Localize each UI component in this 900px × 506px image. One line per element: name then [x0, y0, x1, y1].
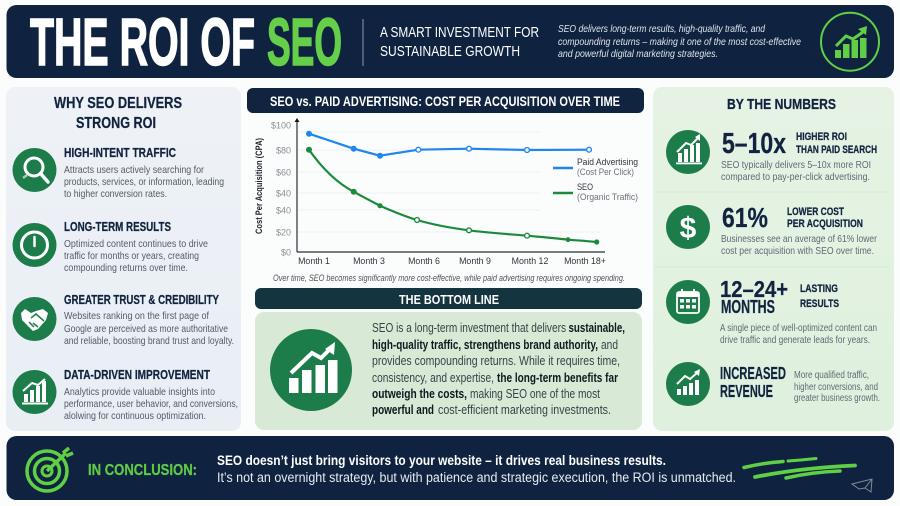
- bottom line text: the long-term benefits far: [497, 370, 618, 385]
- bottom line text: outweigh the costs,: [372, 386, 467, 401]
- item: greater trust and credibility: and reliable, boosting brand trust and loyalty.: [64, 335, 234, 347]
- bottom line text: and: [601, 337, 618, 352]
- stat: 61% lower cost: 61%: [722, 202, 768, 233]
- item: data-driven improvement: Analytics provide valuable insights into: [64, 386, 215, 398]
- stat: 61% lower cost: LOWER COST: [787, 206, 844, 218]
- icon: growth chart: [270, 329, 352, 411]
- legend: Paid Advertising: [577, 157, 638, 168]
- item: data-driven improvement: alolwing for continuous optimization.: [64, 410, 206, 422]
- stat: increased revenue: INCREASED: [720, 363, 786, 383]
- legend: (Organic Traffic): [577, 192, 638, 202]
- x axis labels: Month 12: [512, 256, 548, 266]
- y axis labels: $40: [276, 188, 291, 198]
- item: data-driven improvement: DATA-DRIVEN IMPROVEMENT: [64, 368, 210, 382]
- item: high-intent traffic: products, services, or information, leading: [64, 176, 224, 188]
- y axis labels: $40: [276, 206, 291, 216]
- icon: growth chart in circle: [821, 13, 879, 71]
- item: high-intent traffic: HIGH-INTENT TRAFFIC: [64, 146, 176, 160]
- header description: and powerful digital marketing strategies.: [558, 48, 718, 60]
- bottom line text: SEO is a long-term investment that delivers: [372, 320, 566, 335]
- title: SEO: [267, 5, 342, 80]
- item: high-intent traffic: Attracts users actively searching for: [64, 164, 204, 176]
- bottom line text: cost-efficient marketing investments.: [438, 402, 611, 417]
- stat: 12-24+ months: [666, 276, 877, 346]
- subtitle: A SMART INVESTMENT FOR: [380, 25, 539, 41]
- bottom line text: making SEO one of the most: [470, 386, 600, 401]
- header description: [558, 23, 801, 60]
- stat: increased revenue: More qualified traffic,: [794, 370, 869, 381]
- item: long-term results: [12, 220, 208, 274]
- stat: increased revenue: higher conversions, and: [794, 382, 878, 393]
- x axis labels: Month 9: [459, 256, 491, 266]
- bottom line text: consistency, and expertise,: [372, 370, 494, 385]
- item: greater trust and credibility: Google are perceived as more authoritative: [64, 323, 228, 335]
- stat: 61% lower cost: $: [680, 212, 697, 245]
- panel: why SEO delivers strong ROI: [6, 87, 241, 431]
- conclusion text: It’s not an overnight strategy, but with patience and strategic execution, the ROI is unmatched.: [217, 470, 736, 485]
- conclusion text: [217, 453, 736, 485]
- y axis labels: $60: [276, 168, 291, 178]
- x axis labels: Month 3: [353, 256, 385, 266]
- item: long-term results: LONG-TERM RESULTS: [64, 220, 171, 234]
- x axis labels: [298, 256, 606, 266]
- title: THE ROI OF: [30, 5, 255, 80]
- panel heading: STRONG ROI: [76, 115, 156, 132]
- bottom line text: high-quality traffic, strengthens brand authority,: [372, 337, 598, 352]
- panel heading: [54, 95, 182, 132]
- bottom line heading bar: [255, 288, 642, 309]
- chart heading bar: [247, 88, 644, 113]
- panel: by the numbers: [653, 87, 894, 431]
- item: greater trust and credibility: [12, 293, 234, 347]
- stat: 61% lower cost: PER ACQUISITION: [787, 218, 863, 230]
- item: greater trust and credibility: Websites ranking on the first page of: [64, 310, 209, 322]
- y axis labels: $80: [276, 146, 291, 156]
- y axis labels: [271, 120, 291, 258]
- stat: 61% lower cost: [666, 202, 877, 257]
- stat: 5-10x higher ROI: compared to pay-per-click advertising.: [721, 171, 870, 183]
- header description: compounding returns – making it one of the most cost-effective: [558, 36, 801, 48]
- series: SEO: [306, 147, 599, 245]
- y axis title: Cost Per Acquisition (CPA): [254, 138, 264, 234]
- y axis labels: $0: [281, 248, 291, 258]
- stat: 12-24+ months: 12–24+: [720, 276, 788, 302]
- stat: 5-10x higher ROI: [666, 128, 877, 183]
- line chart: cost per acquisition: [254, 118, 638, 283]
- x axis labels: Month 6: [408, 256, 440, 266]
- item: high-intent traffic: [12, 146, 224, 200]
- legend: SEO: [577, 182, 593, 193]
- icon: paper plane: [852, 479, 872, 492]
- stat: 12-24+ months: LASTING: [800, 283, 838, 295]
- bottom line text: sustainable,: [568, 320, 625, 335]
- item: long-term results: Optimized content continues to drive: [64, 238, 208, 250]
- chart caption: Over time, SEO becomes significantly more cost-effective, while paid advertising requires ongoing spending.: [273, 273, 625, 283]
- stat: 5-10x higher ROI: HIGHER ROI: [796, 131, 847, 143]
- bottom line heading bar: THE BOTTOM LINE: [399, 293, 499, 307]
- bottom line text: powerful and: [372, 402, 434, 417]
- bottom line text: provides compounding returns. While it requires time,: [372, 353, 620, 368]
- stat: 5-10x higher ROI: 5–10x: [722, 128, 786, 160]
- panel heading: BY THE NUMBERS: [727, 96, 836, 113]
- stat: increased revenue: [666, 362, 880, 406]
- x axis labels: Month 1: [298, 256, 330, 266]
- header banner: [6, 5, 894, 80]
- item: greater trust and credibility: GREATER TRUST & CREDIBILITY: [64, 293, 220, 307]
- y axis labels: $20: [276, 228, 291, 238]
- item: long-term results: traffic for months or years, creating: [64, 250, 199, 262]
- legend: [553, 157, 638, 202]
- conclusion banner: [6, 436, 894, 500]
- panel heading: WHY SEO DELIVERS: [54, 95, 182, 112]
- panel: the bottom line: [255, 312, 642, 430]
- chart heading bar: SEO vs. PAID ADVERTISING: COST PER ACQUISITION OVER TIME: [270, 94, 620, 109]
- stat: 12-24+ months: RESULTS: [800, 298, 839, 310]
- stat: 5-10x higher ROI: SEO typically delivers 5–10x more ROI: [721, 159, 871, 171]
- subtitle: SUSTAINABLE GROWTH: [380, 44, 520, 60]
- subtitle: [380, 25, 539, 60]
- conclusion label: IN CONCLUSION:: [88, 462, 197, 479]
- stat: increased revenue: REVENUE: [720, 381, 773, 401]
- stat: 12-24+ months: MONTHS: [721, 296, 775, 317]
- item: data-driven improvement: performance, user behavior, and conversions,: [64, 398, 238, 410]
- conclusion text: SEO doesn’t just bring visitors to your website – it drives real business results.: [217, 453, 666, 468]
- x axis labels: Month 18+: [564, 256, 606, 266]
- item: long-term results: compounding returns over time.: [64, 262, 188, 274]
- item: data-driven improvement: [12, 368, 238, 422]
- green scribble: [744, 458, 855, 478]
- legend: (Cost Per Click): [577, 167, 634, 177]
- bottom line text: [372, 320, 625, 417]
- icon: target with arrow: [27, 448, 73, 491]
- item: high-intent traffic: to higher conversion rates.: [64, 188, 167, 200]
- header description: SEO delivers long-term results, high-quality traffic, and: [558, 23, 766, 35]
- series: paid advertising: [306, 131, 591, 159]
- y axis labels: $100: [271, 120, 291, 130]
